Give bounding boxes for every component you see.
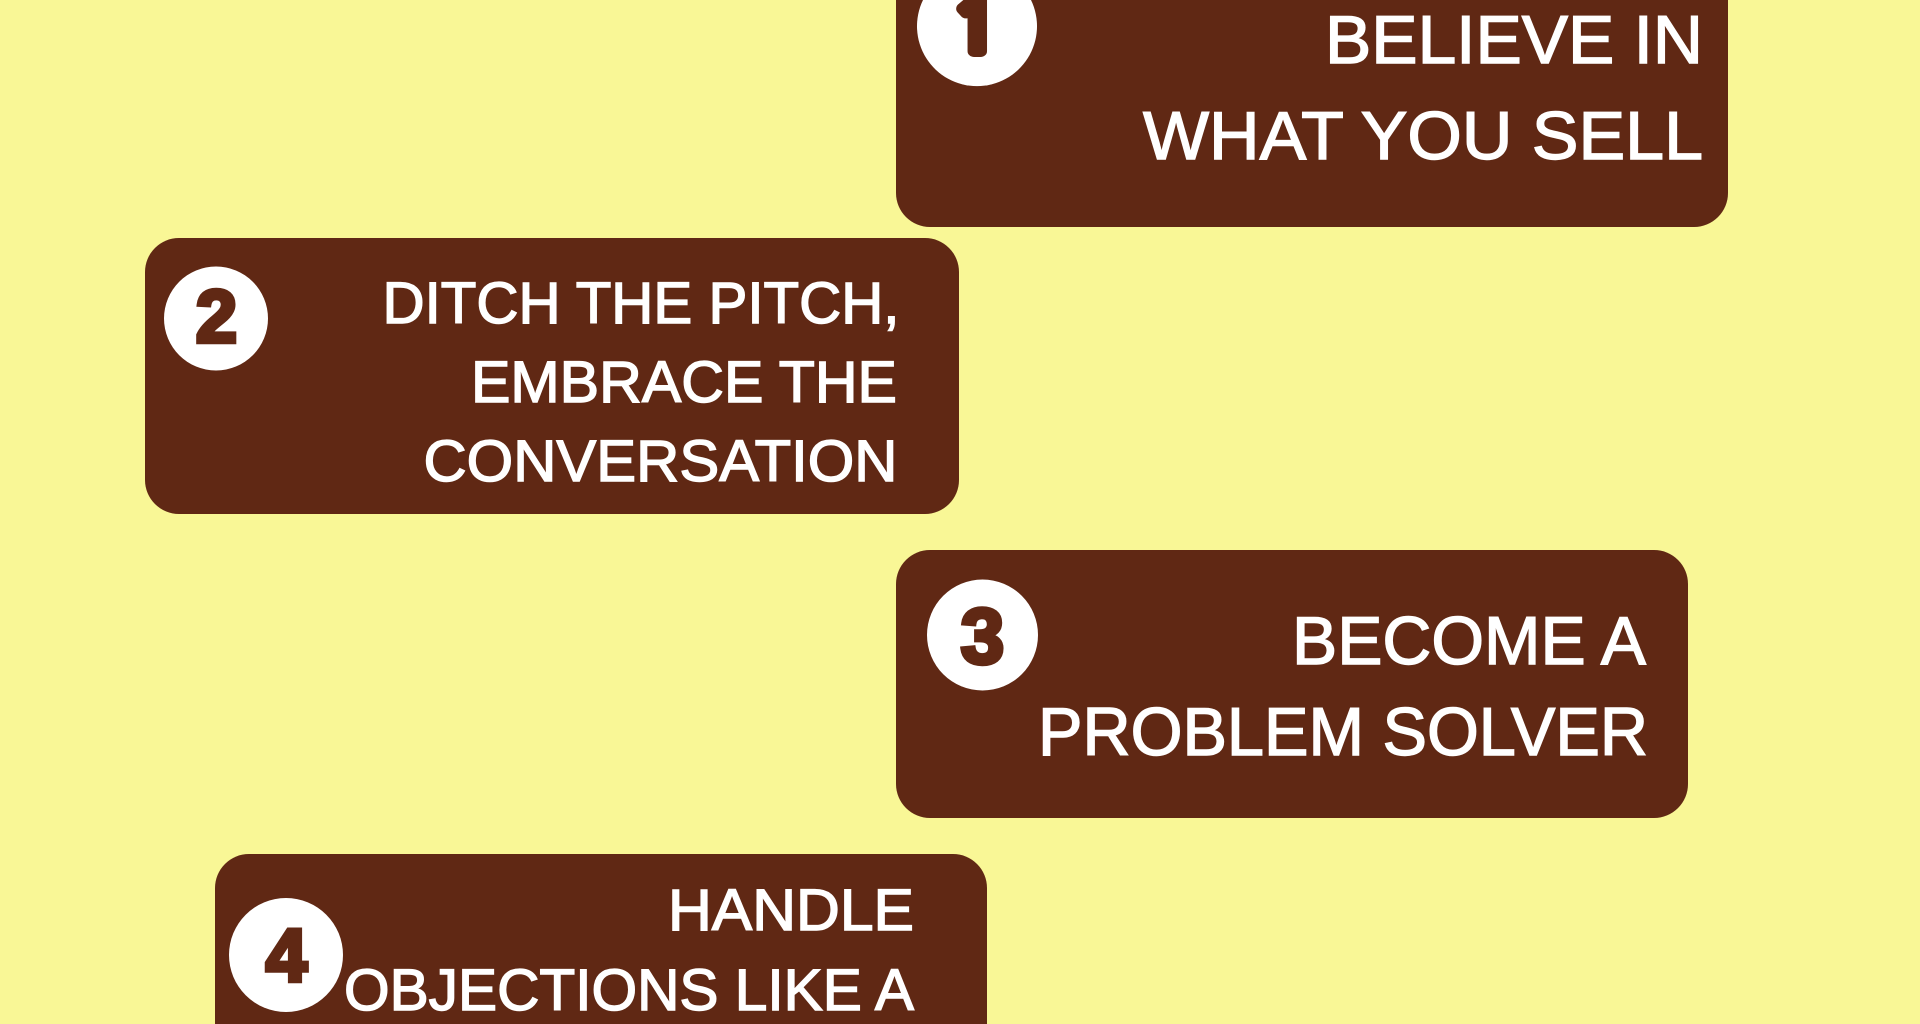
text: believe in what you sell: WHAT YOU SELL xyxy=(1143,98,1703,174)
text: become a problem solver: PROBLEM SOLVER xyxy=(1038,694,1648,770)
text: handle objections like a xyxy=(344,878,914,1023)
icon: number 4 badge: 4 xyxy=(266,914,307,997)
text: become a problem solver xyxy=(1038,603,1648,770)
text: ditch the pitch, embrace the conversation xyxy=(382,271,900,494)
icon: number 2 badge: 2 xyxy=(196,275,237,358)
text: ditch the pitch, embrace the conversation: DITCH THE PITCH, xyxy=(382,271,900,336)
icon: number 3 badge: 3 xyxy=(961,592,1004,680)
text: ditch the pitch, embrace the conversation: EMBRACE THE xyxy=(471,350,897,415)
text: handle objections like a: HANDLE xyxy=(668,878,914,943)
panel: step 2 xyxy=(145,238,959,514)
icon: number 2 badge xyxy=(164,266,268,370)
text: ditch the pitch, embrace the conversation: CONVERSATION xyxy=(424,429,898,494)
text: handle objections like a: OBJECTIONS LIKE A xyxy=(344,958,914,1023)
icon: number 3 badge xyxy=(927,580,1038,690)
text: believe in what you sell: BELIEVE IN xyxy=(1325,2,1703,78)
panel: step 1 xyxy=(896,0,1728,227)
panel: step 4 xyxy=(215,854,987,1024)
text: believe in what you sell xyxy=(1143,2,1703,174)
text: become a problem solver: BECOME A xyxy=(1292,603,1647,679)
panel: step 3 xyxy=(896,550,1688,818)
icon: number 1 badge xyxy=(917,0,1037,86)
icon: number 4 badge xyxy=(229,898,343,1012)
